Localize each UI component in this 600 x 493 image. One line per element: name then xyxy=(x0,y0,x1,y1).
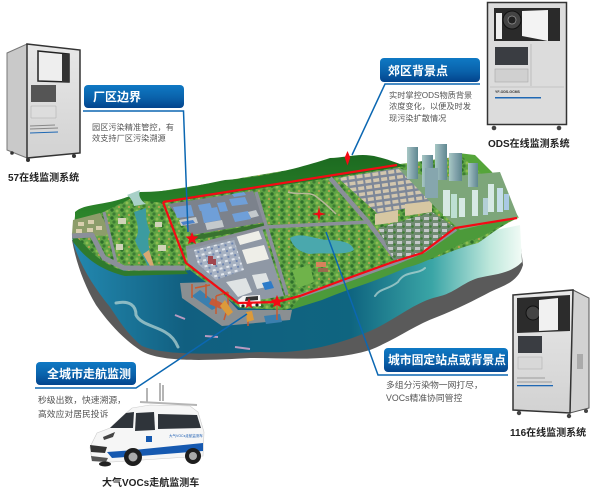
heading text: 厂区边界 xyxy=(93,89,141,104)
caption: ODS system: ODS在线监测系统 xyxy=(488,137,570,150)
land xyxy=(72,155,518,310)
heading text: 郊区背景点 xyxy=(388,63,448,78)
map van xyxy=(238,295,261,308)
description: 高效应对居民投诉 xyxy=(38,408,109,419)
red star markers xyxy=(186,151,350,308)
heading button xyxy=(384,348,508,372)
villas xyxy=(378,212,456,262)
van body xyxy=(90,405,204,462)
right-hand slope xyxy=(458,153,519,218)
leader line: urban fixed station xyxy=(326,232,508,375)
grille and logo xyxy=(90,445,107,453)
red boundary line xyxy=(163,165,517,303)
cabinet: ODS system xyxy=(488,2,566,130)
monitoring van: 大气VOCs走航监测车 xyxy=(169,433,203,438)
panel: 城市固定站点或背景点 xyxy=(384,348,508,403)
canal at hill gap xyxy=(127,190,146,206)
central park xyxy=(258,180,396,295)
heading button xyxy=(380,58,480,82)
cabinet: 116 system xyxy=(513,290,589,418)
description: 效支持厂区污染溯源 xyxy=(92,133,166,143)
leader line: suburban background point xyxy=(352,84,480,155)
caption: van: 大气VOCs走航监测车 xyxy=(102,476,199,489)
description: 现污染扩散情况 xyxy=(389,113,446,123)
river foam xyxy=(116,268,425,347)
description: 浓度变化，以便及时发 xyxy=(389,101,471,111)
description: VOCs精准协同管控 xyxy=(386,392,462,403)
blue stripe xyxy=(107,443,203,458)
riverbank grass xyxy=(290,218,518,310)
island base xyxy=(72,240,523,360)
cabinet: ODS system: YF-ODS-GCMS xyxy=(495,90,521,94)
caption: 57 system: 57在线监测系统 xyxy=(8,171,79,184)
factory north zone xyxy=(168,191,268,240)
caption: 116 system: 116在线监测系统 xyxy=(510,426,586,439)
river xyxy=(72,225,522,354)
hill xyxy=(75,155,405,228)
panel: 厂区边界 xyxy=(84,85,184,143)
monitoring van xyxy=(90,383,204,466)
factory south zone xyxy=(186,228,284,303)
high-rise buildings xyxy=(398,144,518,230)
heading button xyxy=(84,85,184,108)
leader line: city mobile monitoring xyxy=(35,314,247,388)
description: 秒级出数，快速溯源， xyxy=(38,395,126,405)
cabinet: 57 system xyxy=(7,44,80,162)
description: 实时掌控ODS物质背景 xyxy=(389,91,472,100)
port and cranes xyxy=(175,282,292,349)
west bank hedge xyxy=(72,235,188,276)
description: 多组分污染物一网打尽， xyxy=(386,380,483,390)
description: 园区污染精准管控，有 xyxy=(92,123,174,132)
residential blocks xyxy=(338,168,434,225)
heading text: 全城市走航监测 xyxy=(47,366,131,381)
heading button xyxy=(36,362,136,385)
west park xyxy=(110,203,182,268)
panel: 郊区背景点 xyxy=(380,58,480,123)
roof equipment xyxy=(140,383,197,405)
windows xyxy=(110,412,134,428)
west village xyxy=(72,213,110,236)
wheels xyxy=(124,448,142,466)
panel: 全城市走航监测 xyxy=(36,362,136,419)
heading text: 城市固定站点或背景点 xyxy=(388,353,506,367)
roads xyxy=(72,178,456,296)
island map xyxy=(72,144,523,360)
leader line: plant boundary xyxy=(83,111,188,232)
